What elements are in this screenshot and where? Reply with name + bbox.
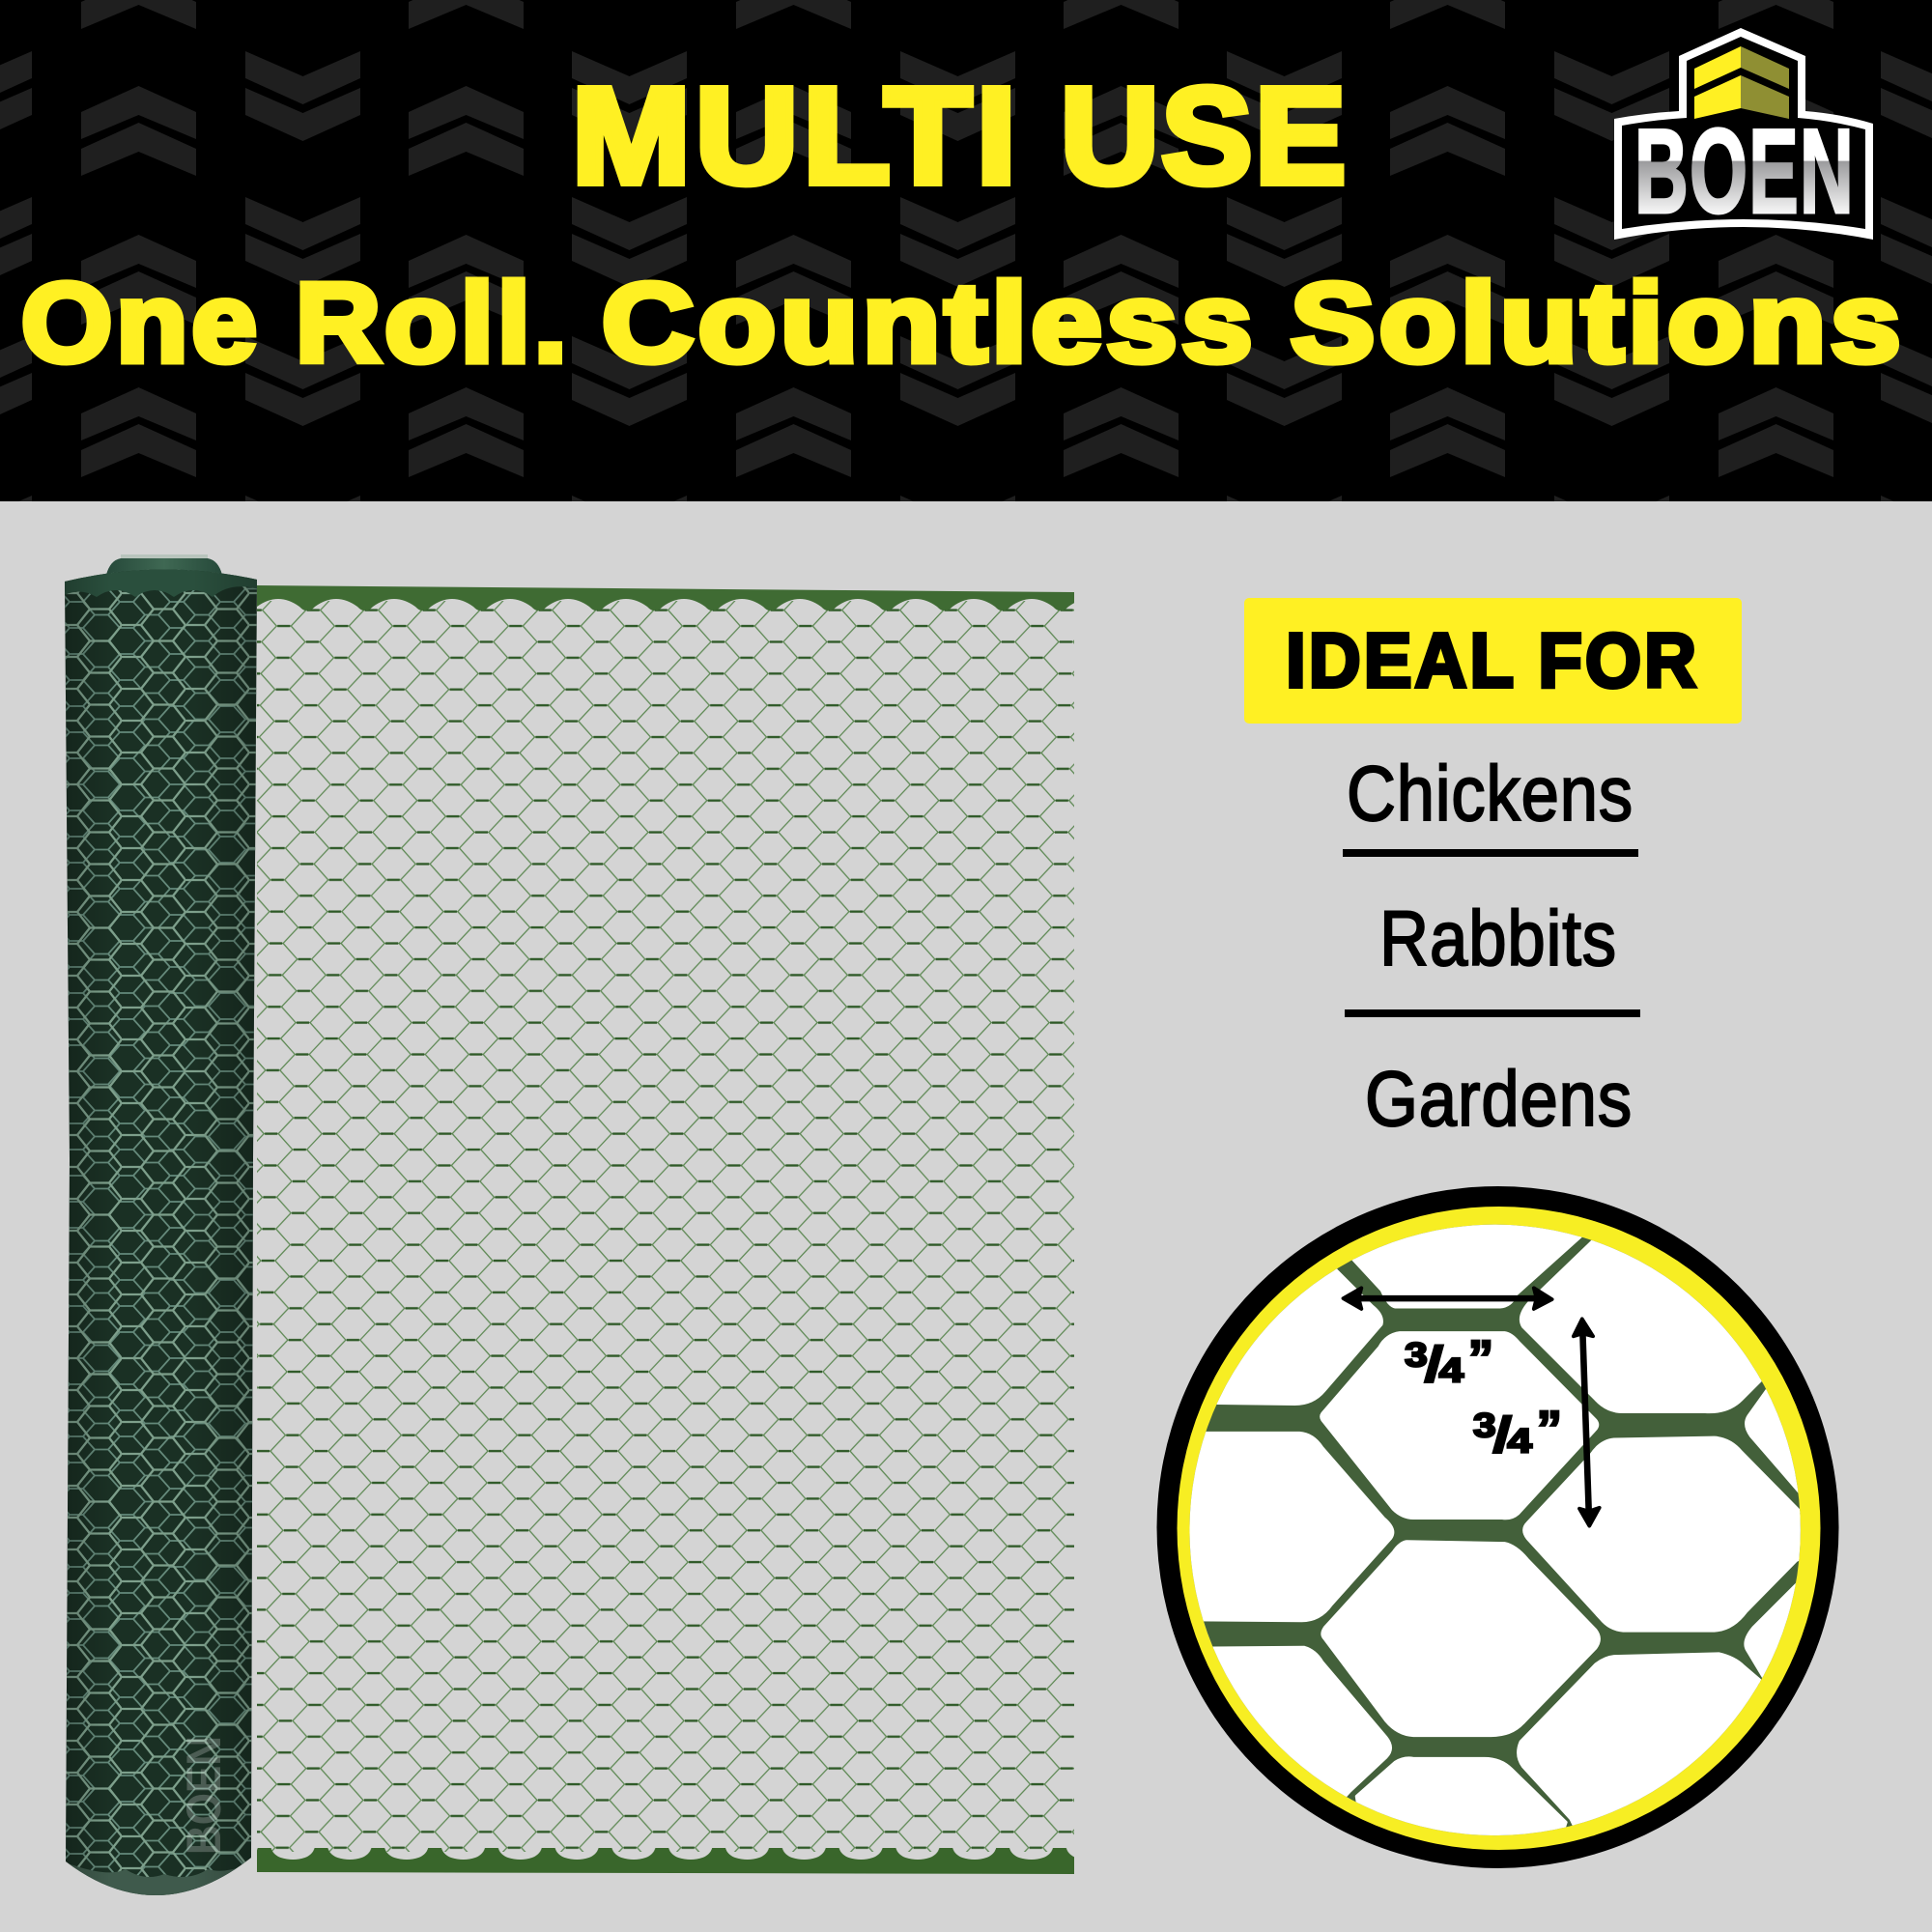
badge: ideal for (1244, 598, 1742, 724)
bottom edge band (257, 1845, 1074, 1874)
dimension label: vertical: 3 (1473, 1407, 1496, 1445)
enlarged hexagonal mesh (1189, 1225, 1801, 1835)
dimension label: horizontal: / (1424, 1336, 1445, 1393)
title: multi use (572, 59, 1349, 212)
panel: ideal for list (1244, 598, 1742, 1143)
arrow: horizontal dimension (1343, 1288, 1552, 1309)
icon: BOEN logo (1614, 28, 1873, 240)
list item: rabbits: Rabbits (1379, 895, 1617, 982)
list item: chickens: Chickens (1347, 751, 1634, 838)
subtitle: one roll countless solutions: Countless (602, 260, 1257, 385)
arrow: vertical dimension (1574, 1319, 1600, 1526)
callout: mesh close-up circle (1140, 1179, 1855, 1893)
list item: gardens: Gardens (1365, 1056, 1633, 1143)
panel: black header (0, 0, 1932, 501)
rolled mesh body (65, 570, 257, 1895)
dimension label: vertical: 4 (1507, 1423, 1533, 1461)
dimension label: vertical: / (1492, 1407, 1514, 1464)
dimension label: vertical (1473, 1401, 1562, 1464)
title: multi use: USE (1061, 59, 1349, 212)
subtitle: one roll countless solutions (21, 260, 1905, 385)
roll core cap (106, 554, 222, 575)
dimension label: horizontal: 3 (1405, 1336, 1428, 1374)
subtitle: one roll countless solutions: One (21, 260, 261, 385)
badge: ideal for: IDEAL FOR (1286, 617, 1699, 703)
watermark on roll: BOEN (177, 1736, 231, 1855)
dimension label: horizontal (1405, 1330, 1493, 1393)
subtitle: one roll countless solutions: Roll. (296, 260, 571, 385)
subtitle: one roll countless solutions: Solutions (1291, 260, 1905, 385)
top edge band (257, 585, 1074, 620)
unrolled hexagonal mesh sheet (257, 601, 1074, 1852)
dimension label: horizontal: ” (1468, 1330, 1493, 1387)
panel: mesh roll product (58, 551, 1074, 1932)
dimension label: vertical: ” (1537, 1401, 1562, 1458)
title: multi use: MULTI (572, 59, 1021, 212)
dimension label: horizontal: 4 (1439, 1351, 1464, 1389)
